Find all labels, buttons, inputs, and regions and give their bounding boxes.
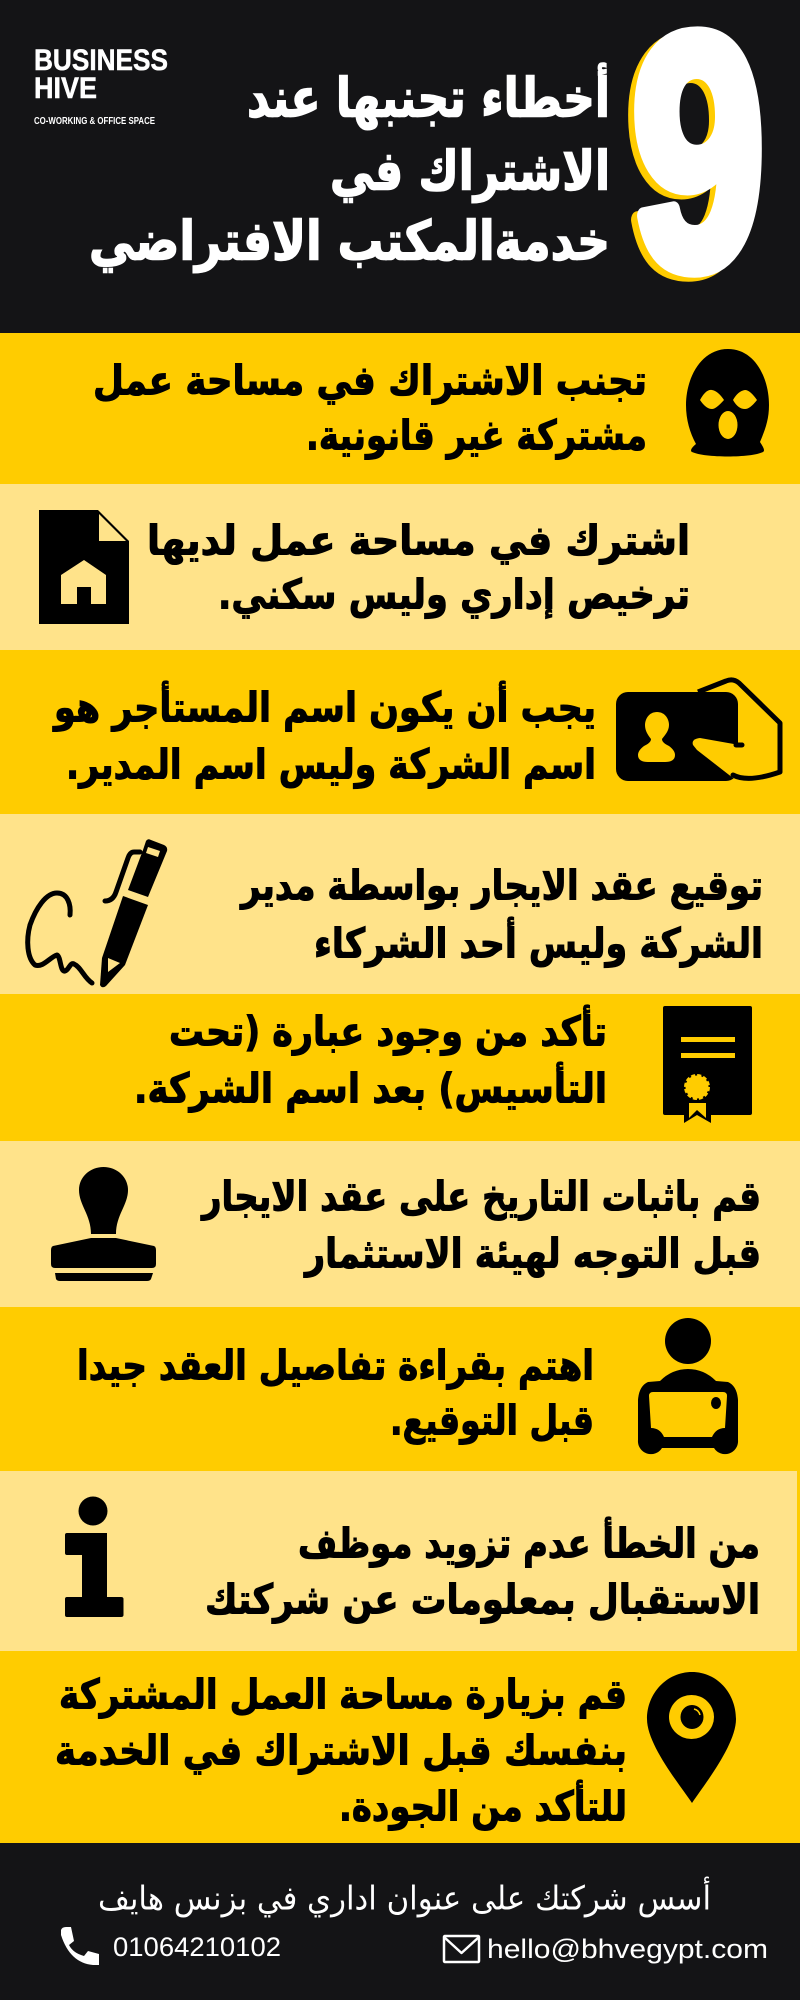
footer tagline: أسس شركتك على عنوان اداري في بزنس هايف bbox=[98, 1876, 711, 1918]
logo bbox=[34, 44, 168, 127]
text: step 2 bbox=[147, 516, 690, 620]
text: step 7: قبل التوقيع. bbox=[390, 1396, 594, 1444]
panel: step 3 bbox=[0, 650, 800, 814]
text: step 4 bbox=[239, 862, 763, 968]
panel: header bbox=[0, 0, 800, 341]
icon: ID card in hand bbox=[616, 680, 780, 781]
title bbox=[89, 62, 610, 272]
text: step 7 bbox=[77, 1342, 594, 1444]
text: step 6 bbox=[200, 1172, 761, 1278]
text: step 9: بنفسك قبل الاشتراك في الخدمة bbox=[55, 1726, 627, 1774]
panel: step 1 bbox=[0, 333, 800, 484]
email address: hello@bhvegypt.com bbox=[487, 1934, 768, 1964]
text: step 5 bbox=[134, 1004, 607, 1112]
panel: step 5 bbox=[0, 994, 800, 1141]
text: step 5: التأسيس) بعد اسم الشركة. bbox=[134, 1062, 607, 1112]
icon: balaclava mask bbox=[686, 349, 769, 456]
icon: rubber stamp bbox=[51, 1167, 156, 1281]
text: step 9: للتأكد من الجودة. bbox=[339, 1780, 627, 1830]
title: الاشتراك في bbox=[330, 140, 610, 202]
text: step 5: تأكد من وجود عبارة (تحت bbox=[169, 1004, 607, 1056]
icon: document with house bbox=[39, 510, 129, 624]
panel: step 6 bbox=[0, 1141, 800, 1307]
text: step 1: مشتركة غير قانونية. bbox=[306, 412, 647, 460]
text: step 8 bbox=[205, 1516, 760, 1624]
icon: certificate bbox=[663, 1006, 752, 1123]
icon: phone bbox=[61, 1927, 99, 1965]
panel: footer bbox=[0, 1843, 800, 2000]
text: step 2: اشترك في مساحة عمل لديها bbox=[147, 516, 690, 564]
icon: information bbox=[65, 1496, 124, 1617]
panel: step 4 bbox=[0, 814, 800, 994]
text: step 9 bbox=[55, 1670, 627, 1830]
panel: step 8 bbox=[0, 1471, 800, 1651]
text: step 9: قم بزيارة مساحة العمل المشتركة bbox=[59, 1670, 627, 1718]
icon: envelope bbox=[444, 1936, 479, 1962]
text: step 1: تجنب الاشتراك في مساحة عمل bbox=[93, 356, 647, 404]
text: step 3 bbox=[52, 680, 596, 790]
icon: person with laptop bbox=[638, 1318, 738, 1454]
phone number: 01064210102 bbox=[113, 1932, 281, 1962]
text: step 7: اهتم بقراءة تفاصيل العقد جيدا bbox=[77, 1342, 594, 1390]
title: خدمةالمكتب الافتراضي bbox=[89, 210, 610, 272]
text: step 3: يجب أن يكون اسم المستأجر هو bbox=[52, 680, 596, 732]
text: step 1 bbox=[93, 356, 647, 460]
logo: HIVE bbox=[34, 72, 97, 105]
panel: step 9 bbox=[0, 1651, 800, 1843]
logo: CO-WORKING & OFFICE SPACE bbox=[34, 116, 155, 127]
icon: pen signing bbox=[28, 839, 167, 987]
panel: step 2 bbox=[0, 484, 800, 650]
logo: BUSINESS bbox=[34, 44, 168, 77]
text: step 3: اسم الشركة وليس اسم المدير. bbox=[66, 740, 596, 790]
panel: step 7 bbox=[0, 1307, 800, 1471]
title: أخطاء تجنبها عند bbox=[247, 62, 610, 130]
text: step 2: ترخيص إداري وليس سكني. bbox=[218, 570, 690, 620]
icon: location pin bbox=[647, 1672, 736, 1803]
